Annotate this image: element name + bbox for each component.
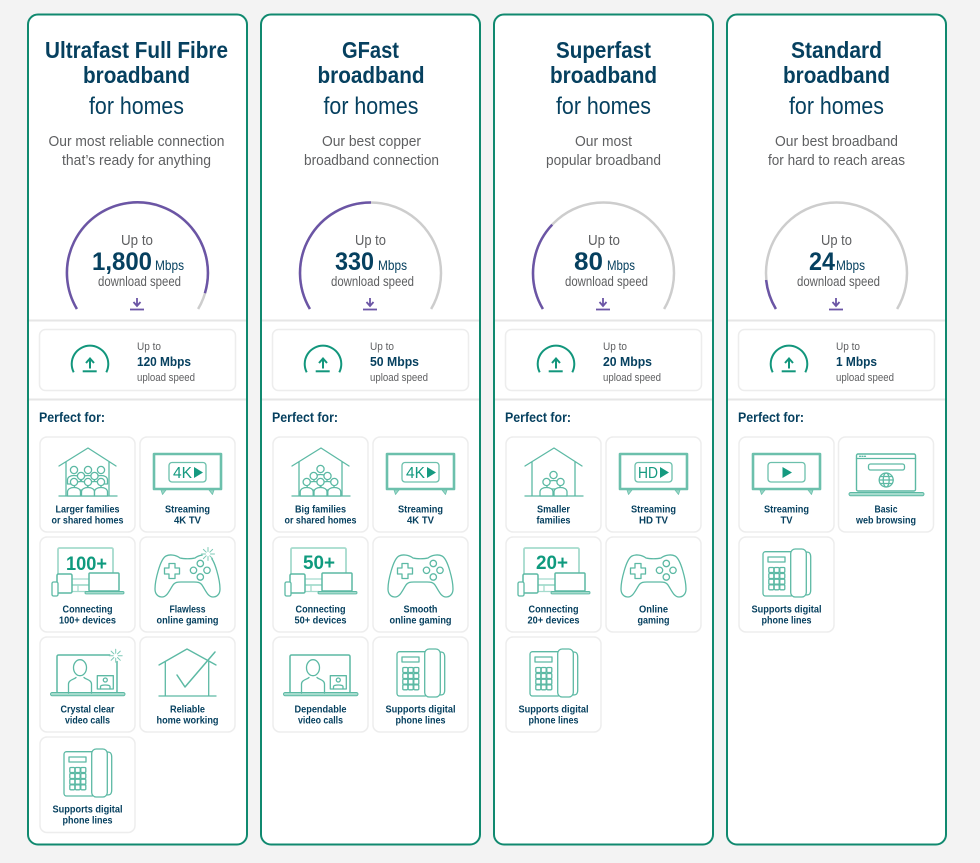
tile: smaller families: families bbox=[536, 514, 571, 526]
download speed gauge: 80 bbox=[574, 248, 603, 276]
tile: big families: Big families bbox=[295, 504, 346, 516]
tile: flawless online gaming: Flawless bbox=[170, 604, 206, 616]
upload speed box: Up to bbox=[370, 341, 394, 353]
description bbox=[304, 133, 439, 169]
download speed gauge: Mbps bbox=[378, 257, 407, 273]
heading: for homes bbox=[556, 93, 651, 120]
download speed gauge: Mbps bbox=[155, 257, 184, 273]
upload speed box: Up to bbox=[603, 341, 627, 353]
tile: digital phone lines bbox=[739, 537, 834, 632]
heading bbox=[318, 37, 424, 120]
download speed gauge: download speed bbox=[331, 274, 414, 289]
heading: GFast bbox=[342, 37, 399, 63]
upload speed box bbox=[40, 330, 236, 390]
download speed gauge: Mbps bbox=[836, 257, 865, 273]
tile: crystal clear video calls: video calls bbox=[65, 714, 110, 726]
perfect for heading: Perfect for: bbox=[738, 410, 804, 425]
tile: streaming 4K TV bbox=[140, 437, 235, 532]
tile: streaming 4K TV: Streaming bbox=[398, 504, 443, 516]
perfect for heading: Perfect for: bbox=[272, 410, 338, 425]
heading: broadband bbox=[783, 62, 890, 88]
upload speed box: Up to bbox=[836, 341, 860, 353]
upload speed box: upload speed bbox=[836, 372, 894, 384]
tile: digital phone lines: Supports digital bbox=[752, 604, 822, 616]
tile: big families bbox=[273, 437, 368, 532]
heading: Ultrafast Full Fibre bbox=[45, 37, 228, 63]
heading: for homes bbox=[324, 93, 418, 120]
description: for hard to reach areas bbox=[768, 152, 905, 169]
divider bbox=[262, 320, 479, 400]
heading bbox=[45, 37, 228, 120]
panel: Standard bbox=[727, 14, 946, 844]
description: broadband connection bbox=[304, 152, 439, 169]
tile: connecting 50+ devices: 50+ bbox=[303, 552, 335, 574]
tile: streaming HD TV: HD TV bbox=[639, 514, 668, 526]
tile: connecting 100+ devices: 100+ bbox=[66, 553, 107, 575]
tile: digital phone lines: Supports digital bbox=[386, 704, 456, 716]
download speed gauge bbox=[766, 202, 907, 310]
upload speed box: upload speed bbox=[603, 372, 661, 384]
tile: online gaming: gaming bbox=[638, 614, 670, 626]
tile: dependable video calls bbox=[273, 637, 368, 732]
tile: dependable video calls: video calls bbox=[298, 714, 343, 726]
card frame bbox=[28, 14, 247, 844]
tile: online gaming bbox=[606, 537, 701, 632]
heading: Superfast bbox=[556, 37, 651, 63]
divider bbox=[495, 320, 712, 400]
tile: digital phone lines bbox=[506, 637, 601, 732]
tile: connecting 50+ devices bbox=[273, 537, 368, 632]
tile: streaming HD TV bbox=[606, 437, 701, 532]
tile: digital phone lines: phone lines bbox=[528, 714, 579, 726]
download speed gauge bbox=[300, 202, 441, 310]
tile: smooth online gaming: online gaming bbox=[390, 614, 452, 626]
upload speed box bbox=[272, 330, 468, 390]
tile: digital phone lines: Supports digital bbox=[518, 704, 589, 716]
heading: broadband bbox=[550, 62, 657, 88]
download speed gauge bbox=[533, 202, 674, 310]
description: Our best broadband bbox=[775, 133, 898, 150]
panel: GFast bbox=[261, 14, 480, 844]
tile: connecting 20+ devices bbox=[506, 537, 601, 632]
perfect for heading: Perfect for: bbox=[39, 410, 105, 425]
tile: connecting 20+ devices: 20+ bbox=[536, 552, 568, 574]
tile: flawless online gaming: online gaming bbox=[156, 614, 218, 626]
tile: streaming 4K TV: 4K TV bbox=[174, 514, 201, 526]
tile: streaming 4K TV: 4K bbox=[173, 465, 192, 482]
description: Our best copper bbox=[322, 133, 421, 150]
tile: online gaming: Online bbox=[639, 604, 668, 616]
download speed gauge: Up to bbox=[821, 233, 852, 249]
download speed gauge: download speed bbox=[565, 274, 648, 289]
download speed gauge: 1,800 bbox=[92, 248, 152, 276]
download speed gauge: 330 bbox=[335, 248, 374, 276]
panel: Superfast bbox=[494, 14, 713, 844]
description bbox=[546, 133, 661, 169]
tile: larger families: Larger families bbox=[56, 504, 120, 516]
tile: digital phone lines bbox=[373, 637, 468, 732]
tile: streaming TV bbox=[739, 437, 834, 532]
download speed gauge: Up to bbox=[355, 233, 386, 249]
tile: streaming TV: Streaming bbox=[764, 504, 809, 516]
description: Our most reliable connection bbox=[48, 133, 224, 150]
description bbox=[48, 133, 224, 169]
tile: streaming HD TV: HD bbox=[638, 465, 658, 482]
tile: basic web browsing: web browsing bbox=[855, 514, 916, 526]
upload speed box: 120 Mbps bbox=[137, 354, 191, 369]
tile: digital phone lines: phone lines bbox=[62, 814, 113, 826]
tile: larger families: or shared homes bbox=[52, 514, 124, 526]
tile: connecting 100+ devices: 100+ devices bbox=[59, 614, 116, 626]
download speed gauge: Mbps bbox=[607, 257, 635, 273]
upload speed box bbox=[506, 330, 702, 390]
tile: basic web browsing: Basic bbox=[874, 504, 898, 516]
upload speed box: 50 Mbps bbox=[370, 354, 419, 369]
tile: streaming 4K TV bbox=[373, 437, 468, 532]
tile: flawless online gaming bbox=[140, 537, 235, 632]
tile: reliable home working: home working bbox=[156, 714, 218, 726]
tile: streaming TV: TV bbox=[780, 514, 792, 526]
card frame bbox=[261, 14, 480, 844]
upload speed box bbox=[738, 330, 934, 390]
download speed gauge: download speed bbox=[797, 274, 880, 289]
tile: crystal clear video calls bbox=[40, 637, 135, 732]
tile: digital phone lines bbox=[40, 737, 135, 832]
tile: connecting 100+ devices bbox=[40, 537, 135, 632]
tile: smooth online gaming: Smooth bbox=[404, 604, 438, 616]
tile: streaming 4K TV: 4K TV bbox=[407, 514, 434, 526]
tile: dependable video calls: Dependable bbox=[294, 704, 347, 716]
tile: connecting 50+ devices: 50+ devices bbox=[294, 614, 347, 626]
download speed gauge bbox=[67, 202, 208, 310]
heading: broadband bbox=[318, 62, 424, 88]
heading bbox=[550, 37, 657, 120]
tile: smooth online gaming bbox=[373, 537, 468, 632]
description: Our most bbox=[575, 133, 633, 150]
heading bbox=[783, 37, 890, 120]
tile: digital phone lines: Supports digital bbox=[52, 804, 123, 816]
heading: Standard bbox=[791, 37, 882, 63]
tile: connecting 20+ devices: 20+ devices bbox=[528, 614, 580, 626]
download speed gauge: Up to bbox=[121, 233, 153, 249]
tile: larger families bbox=[40, 437, 135, 532]
download speed gauge: 24 bbox=[809, 248, 835, 276]
tile: digital phone lines: phone lines bbox=[396, 714, 446, 726]
card frame bbox=[494, 14, 713, 844]
heading: for homes bbox=[789, 93, 884, 120]
perfect for heading: Perfect for: bbox=[505, 410, 571, 425]
tile: digital phone lines: phone lines bbox=[762, 614, 812, 626]
description bbox=[768, 133, 905, 169]
tile: smaller families: Smaller bbox=[537, 504, 570, 516]
tile: big families: or shared homes bbox=[284, 514, 357, 526]
tile: crystal clear video calls: Crystal clear bbox=[60, 704, 114, 716]
divider bbox=[29, 320, 246, 400]
tile: streaming 4K TV: 4K bbox=[406, 465, 425, 482]
upload speed box: 1 Mbps bbox=[836, 354, 877, 369]
tile: basic web browsing bbox=[838, 437, 934, 532]
tile: reliable home working: Reliable bbox=[170, 704, 205, 716]
heading: broadband bbox=[83, 62, 190, 88]
upload speed box: 20 Mbps bbox=[603, 354, 652, 369]
divider bbox=[728, 320, 945, 400]
upload speed box: Up to bbox=[137, 341, 161, 353]
tile: connecting 50+ devices: Connecting bbox=[296, 604, 346, 616]
download speed gauge: Up to bbox=[588, 233, 620, 249]
tile: connecting 20+ devices: Connecting bbox=[528, 604, 578, 616]
card frame bbox=[727, 14, 946, 844]
upload speed box: upload speed bbox=[370, 372, 428, 384]
tile: connecting 100+ devices: Connecting bbox=[62, 604, 112, 616]
tile: streaming HD TV: Streaming bbox=[631, 504, 676, 516]
download speed gauge: download speed bbox=[98, 274, 181, 289]
heading: for homes bbox=[89, 93, 184, 120]
upload speed box: upload speed bbox=[137, 372, 195, 384]
tile: streaming 4K TV: Streaming bbox=[165, 504, 210, 516]
panel: Ultrafast Full Fibre bbox=[28, 14, 247, 844]
tile: smaller families bbox=[506, 437, 601, 532]
description: that’s ready for anything bbox=[62, 152, 211, 169]
description: popular broadband bbox=[546, 152, 661, 169]
tile: reliable home working bbox=[140, 637, 235, 732]
